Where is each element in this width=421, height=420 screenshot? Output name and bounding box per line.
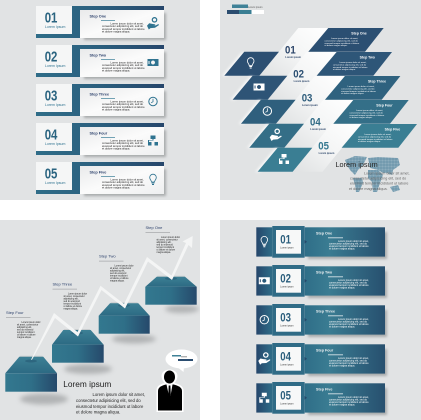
label: step three: Step Three [52, 282, 73, 286]
left tile: bulb [222, 52, 279, 76]
label: step four: sit amet, consectetur [17, 324, 38, 326]
label: step two: Lorem ipsum dolor [114, 264, 134, 268]
right tile: step four: consectetur adipisicing elit, sed do [350, 111, 384, 114]
right tile: step three: consectetur adipisicing elit, sed do [341, 87, 375, 90]
banner: step five: et dolore magna aliqua. [329, 403, 355, 406]
banner: step two: consectetur adipisicing elit, sed do [329, 281, 368, 284]
text block: Lorem ipsum: consectetur adipisicing elit, sed do [76, 398, 141, 403]
legend: colour swatches: Lorem ipsum [248, 6, 262, 9]
right tile: step one [308, 28, 384, 52]
card: step three: consectetur adipisicing elit, sed do [102, 102, 143, 106]
panel: bottom-right banners background [220, 220, 421, 420]
right tile: step five: eiusmod tempor incididunt ut labore [358, 138, 393, 141]
card: step five: consectetur adipisicing elit, sed do [102, 180, 143, 184]
banner: step one: consectetur adipisicing elit, sed do [329, 242, 368, 245]
block: step two [99, 302, 156, 344]
numbers on white ribbons: 04 [310, 116, 321, 128]
card: step five: eiusmod tempor incididunt ut labore [102, 183, 145, 187]
right tile: step five [342, 124, 417, 148]
numbers on white ribbons: Lorem ipsum [310, 128, 327, 131]
banner: step three: consectetur adipisicing elit, sed do [329, 320, 368, 323]
numbers on white ribbons: Lorem ipsum [302, 104, 318, 107]
card: step two: et dolore magna aliqua. [102, 69, 130, 73]
right tile: step five: et dolore magna aliqua. [358, 140, 381, 143]
card: step two: Lorem ipsum dolor sit amet, [110, 60, 144, 64]
label: step two [99, 254, 134, 282]
right tile: step five: Step Five [385, 128, 400, 132]
card: step two [36, 45, 166, 79]
banner: step two: 02 [280, 273, 291, 285]
label: step three: sit amet, consectetur [64, 295, 85, 298]
left parallelograms with icons [222, 52, 312, 172]
label: step two: sit amet, consectetur [110, 267, 131, 270]
banner: step two: et dolore magna aliqua. [329, 286, 355, 289]
block: step four [5, 356, 68, 404]
numbers on white ribbons: 03 [302, 92, 312, 104]
text block: Lorem ipsum: eiusmod tempor incididunt ut labore [76, 404, 144, 409]
left tile: clock [239, 100, 296, 124]
card: step four [36, 123, 166, 157]
label: step two: adipisicing elit, [110, 270, 125, 272]
card: step five [36, 162, 166, 196]
map caption: Lorem ipsum: Lorem ipsum dolor sit amet, [364, 172, 410, 176]
banner: step one: 01 [280, 234, 292, 246]
banner: step one: eiusmod tempor incididunt ut labore [329, 245, 369, 248]
world map [345, 156, 400, 192]
banner: step four: Lorem ipsum [280, 364, 294, 366]
banner: step five: Step Five [316, 388, 332, 392]
card: step two: eiusmod tempor incididunt ut labore [102, 66, 145, 70]
banner: step four: 04 [280, 351, 292, 363]
right tile: step one: consectetur adipisicing elit, sed do [324, 39, 359, 42]
card: step one: consectetur adipisicing elit, sed do [102, 24, 143, 28]
label: step four: adipisicing elit, [17, 326, 32, 329]
numbers on white ribbons: Lorem ipsum [319, 152, 335, 155]
card: step three: Lorem Ipsum [45, 103, 66, 107]
label: step two: tempor incididunt [110, 274, 128, 278]
map caption: Lorem ipsum: et dolore magna aliqua. [349, 187, 388, 191]
card: step one: Lorem ipsum dolor sit amet, [110, 22, 144, 26]
card: step four: consectetur adipisicing elit, sed do [102, 141, 143, 145]
banner: step one: et dolore magna aliqua. [329, 247, 355, 250]
block: step three [52, 329, 112, 374]
icon: businessman with speech bubble [156, 350, 198, 412]
label: step three: adipisicing elit, [64, 298, 79, 300]
map caption: Lorem ipsum: eiusmod tempor incididunt ut labore [350, 182, 408, 186]
banner: step three: 03 [280, 312, 291, 324]
label: step two: ut labore et dolore [110, 277, 129, 280]
banner: step one: Lorem ipsum dolor sit amet, [338, 240, 369, 243]
label: step four [6, 310, 41, 339]
label: step one: sit amet, consectetur [156, 238, 178, 242]
card: step five: Step Five [90, 170, 106, 174]
banner: step four: Lorem ipsum dolor sit amet, [338, 357, 369, 360]
numbers on white ribbons: 01 [285, 44, 296, 56]
label: step one: tempor incididunt [156, 246, 174, 249]
banner: step four [256, 343, 387, 376]
map caption: Lorem ipsum [336, 160, 410, 191]
right tile: step four [333, 100, 409, 124]
card: step one: 01 [45, 10, 57, 26]
label: step one: ut labore et dolore [156, 248, 176, 252]
banner: step three: eiusmod tempor incididunt ut labore [329, 323, 369, 326]
right tile: step four: eiusmod tempor incididunt ut labore [350, 114, 385, 117]
card: step four: Step Four [90, 131, 108, 135]
bottom-right banners [256, 226, 387, 415]
top-left step cards [36, 6, 166, 196]
card: step one [36, 6, 166, 40]
step labels on stairs [6, 225, 180, 339]
card: step two: Lorem Ipsum [45, 64, 66, 68]
banner: step two: Step Two [316, 270, 333, 274]
card: step five: Lorem ipsum dolor sit amet, [110, 178, 144, 182]
card: step two: Step Two [90, 53, 107, 57]
panel: top-left steps background [0, 0, 200, 200]
right tile: step three: Lorem ipsum dolor sit amet, [348, 85, 375, 88]
right tile: step four: Step Four [376, 104, 393, 108]
banner: step three: Lorem ipsum dolor sit amet, [338, 318, 369, 321]
label: step three: tempor incididunt [64, 302, 81, 306]
label: step three [52, 282, 87, 310]
right tile: step three: eiusmod tempor incididunt ut labore [341, 90, 377, 93]
card: step four: Lorem Ipsum [45, 142, 66, 146]
banner: step two: Lorem ipsum dolor sit amet, [338, 279, 369, 282]
right tile: step three [325, 76, 400, 100]
card: step one: eiusmod tempor incididunt ut labore [102, 27, 145, 31]
white parallelogram ribbons [259, 28, 362, 172]
label: step two: Step Two [99, 254, 116, 258]
label: step three: Lorem ipsum dolor [68, 292, 87, 296]
numbers on white ribbons: Lorem ipsum [294, 80, 310, 83]
left tile: cash [230, 76, 287, 100]
banner: step five: Lorem ipsum dolor sit amet, [338, 396, 369, 399]
banner: step five [256, 382, 387, 415]
right tile: step two: consectetur adipisicing elit, sed do [333, 63, 367, 66]
banner: step one: Step One [316, 232, 332, 236]
banner: step three: Step Three [316, 310, 335, 314]
label: step one: adipisicing elit, [156, 241, 172, 244]
label: step one: magna aliqua. [156, 252, 171, 254]
banner: step five: consectetur adipisicing elit, sed do [329, 398, 368, 401]
arrow: rising zigzag [31, 236, 193, 360]
card: step five: Lorem Ipsum [45, 181, 66, 185]
numbers on white ribbons: 05 [318, 140, 329, 152]
banner: step three: et dolore magna aliqua. [329, 325, 355, 328]
right tile: step two [317, 52, 392, 76]
label: step three: magna aliqua. [64, 308, 78, 310]
block: step one [145, 276, 199, 313]
card: step three: et dolore magna aliqua. [102, 108, 130, 112]
card: step two: consectetur adipisicing elit, sed do [102, 63, 143, 67]
text block: Lorem ipsum: Lorem ipsum dolor sit amet, [92, 392, 145, 397]
card: step two: 02 [45, 50, 57, 66]
right tile: step four: et dolore magna aliqua. [350, 116, 373, 119]
card: step one: Lorem Ipsum [45, 25, 66, 29]
label: step three: ut labore et dolore [64, 305, 83, 308]
label: step one [146, 225, 180, 254]
label: step four: tempor incididunt [17, 331, 35, 334]
banner: step one: Lorem ipsum [280, 246, 294, 250]
map caption: Lorem ipsum: Lorem ipsum [336, 160, 378, 169]
banner: step four: Step Four [316, 348, 334, 352]
banner: step two: Lorem ipsum [280, 286, 294, 288]
right tile: step three: Step Three [368, 80, 386, 84]
card: step three: eiusmod tempor incididunt ut labore [102, 105, 145, 109]
label: step one: sed do eiusmod [156, 244, 173, 246]
banner: step two: eiusmod tempor incididunt ut labore [329, 284, 369, 287]
right tile: step three: et dolore magna aliqua. [341, 92, 364, 95]
card: step one: et dolore magna aliqua. [102, 30, 130, 34]
right tile: step five: consectetur adipisicing elit, sed do [358, 135, 392, 138]
label: step four: Step Four [6, 310, 24, 315]
banner: step one [256, 226, 387, 259]
text block: Lorem ipsum: Lorem ipsum [63, 379, 111, 389]
numbers on white ribbons [285, 44, 335, 155]
card: step five: 05 [45, 166, 57, 182]
card: step three: 03 [45, 88, 57, 104]
banner: step five: eiusmod tempor incididunt ut labore [329, 401, 369, 404]
right tile: step four: Lorem ipsum dolor sit amet, [356, 109, 383, 112]
label: step three: sed do eiusmod [64, 301, 80, 303]
right parallelograms with text [308, 28, 417, 148]
stair blocks [5, 276, 199, 404]
banner: step four: et dolore magna aliqua. [329, 364, 355, 367]
card: step four: et dolore magna aliqua. [102, 147, 130, 151]
right tile: step two: Lorem ipsum dolor sit amet, [339, 61, 367, 64]
banner: step five: 05 [280, 390, 292, 402]
card: step three [36, 84, 166, 118]
card: step four: eiusmod tempor incididunt ut labore [102, 144, 145, 148]
right tile: step one: Step One [351, 32, 367, 36]
label: step one: Step One [146, 225, 163, 230]
right tile: step one: et dolore magna aliqua. [324, 44, 348, 47]
map caption: Lorem ipsum: consectetur adipisicing elit, sed do [350, 176, 406, 180]
left tile: org chart [255, 148, 312, 172]
card: step one: Step One [90, 14, 106, 18]
label: step four: magna aliqua. [17, 337, 32, 339]
card: step three: Lorem ipsum dolor sit amet, [110, 100, 144, 104]
banner: step four: consectetur adipisicing elit, sed do [329, 359, 368, 362]
label: step four: Lorem ipsum dolor [22, 321, 41, 324]
text block: Lorem ipsum: et dolore magna aliqua. [76, 410, 120, 414]
banner: step five: Lorem ipsum [280, 402, 294, 406]
label: step one: Lorem ipsum dolor [161, 236, 180, 239]
right tile: step two: eiusmod tempor incididunt ut labore [333, 66, 368, 69]
legend: colour swatches [227, 4, 264, 14]
label: step four: ut labore et dolore [17, 334, 36, 336]
card: step four: 04 [45, 128, 57, 144]
card: step four: Lorem ipsum dolor sit amet, [110, 138, 144, 142]
banner: step two [256, 265, 387, 298]
card: step three: Step Three [90, 92, 109, 96]
numbers on white ribbons: Lorem ipsum [285, 56, 302, 59]
right tile: step two: et dolore magna aliqua. [333, 68, 356, 71]
banner: step three [256, 304, 387, 337]
right tile: step five: Lorem ipsum dolor sit amet, [364, 133, 392, 136]
right tile: step two: Step Two [360, 56, 375, 60]
numbers on white ribbons: 02 [293, 68, 304, 80]
banner: step four: eiusmod tempor incididunt ut labore [329, 362, 369, 365]
right tile: step one: eiusmod tempor incididunt ut labore [324, 42, 360, 45]
label: step two: magna aliqua. [110, 280, 125, 282]
banner: step three: Lorem ipsum [280, 324, 294, 328]
text block: Lorem ipsum [63, 379, 145, 414]
label: step two: sed do eiusmod [110, 273, 127, 275]
card: step five: et dolore magna aliqua. [102, 186, 130, 190]
label: step four: sed do eiusmod [17, 330, 34, 332]
panel: bottom-left stair background [0, 220, 200, 420]
panel: top-right parallelograms background [220, 0, 421, 200]
right tile: step one: Lorem ipsum dolor sit amet, [331, 37, 358, 40]
left tile: hand [247, 124, 304, 148]
